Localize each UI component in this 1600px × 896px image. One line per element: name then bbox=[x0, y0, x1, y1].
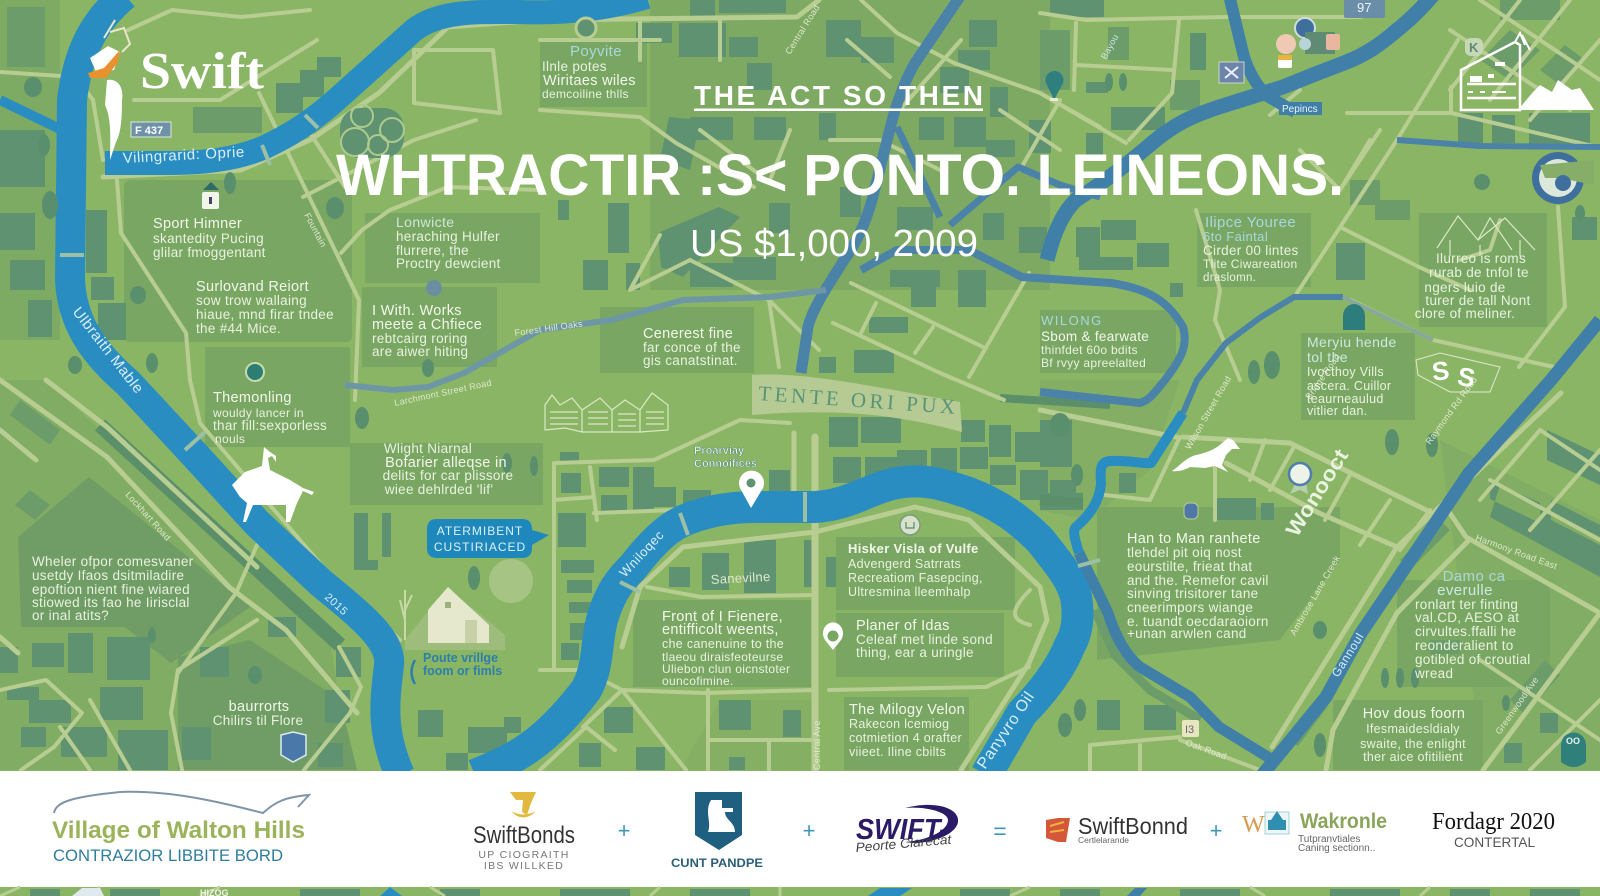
river: west branch bbox=[0, 100, 62, 130]
text block: Meryiu hende: vitlier dan. bbox=[1307, 404, 1368, 418]
text block: Han to Man: cneerimpors wiange bbox=[1127, 600, 1253, 615]
text block: Ilipce Youree: Ilipce Youree bbox=[1205, 214, 1296, 231]
label: Pepincs: Pepincs bbox=[1282, 104, 1318, 115]
text block: Meryiu hende: Ivocthoy Vills bbox=[1307, 365, 1384, 379]
text block: The Milogy Velon: The Milogy Velon bbox=[849, 702, 965, 718]
footer logo: Fordagr 2020: Fordagr 2020 bbox=[1432, 809, 1555, 835]
label: west river: Ulbraith Mable bbox=[69, 304, 147, 397]
text block: Wlight Niarnal: delits for car plissore bbox=[383, 468, 513, 483]
icon: white horse bbox=[232, 447, 314, 522]
text block: Ilipce Youree: Tlite Ciwareation bbox=[1203, 257, 1297, 271]
small road labels: Fountain bbox=[302, 211, 329, 249]
icon: owl marker bbox=[1561, 732, 1586, 767]
icon: blue badge bbox=[1184, 503, 1198, 519]
text block: Hisker: Recreatiom Fasepcing, bbox=[848, 571, 983, 585]
text block: Hisker: Hisker Visla of Vulfe bbox=[848, 541, 979, 556]
text block: Wilong: Sbom & fearwate bbox=[1041, 329, 1149, 344]
footer logo: SwiftBonds bbox=[473, 792, 575, 872]
text block: Front of I Fienere: ouncofimine. bbox=[662, 674, 734, 688]
icon: white dog bbox=[1172, 438, 1240, 472]
text block: Hisker: Ultresmina lleemhalp bbox=[848, 585, 971, 599]
footer logo: Wakronle: Caning sectionn.. bbox=[1298, 843, 1375, 854]
banner: Tente Ori Pux bbox=[752, 374, 962, 432]
footer logo: Wakronle: W bbox=[1242, 812, 1265, 838]
icon: house sketches bbox=[1437, 216, 1535, 256]
banner: Tente Ori Pux: TENTE ORI PUX bbox=[758, 381, 959, 419]
text block: Sport Himner: skantedity Pucing bbox=[153, 231, 264, 246]
river: northeast bbox=[1047, 0, 1433, 260]
footer logo: Village of Walton Hills: Village of Walton Hills bbox=[52, 817, 305, 844]
text block: Hisker bbox=[848, 541, 983, 599]
text block: Wheeler: usetdy Ifaos dsitmiladire bbox=[32, 568, 184, 583]
text block: Damo ca: gotibled of croutial bbox=[1415, 652, 1531, 667]
text block: Meryiu hende: tol the bbox=[1307, 349, 1348, 365]
text block: Han to Man: Han to Man ranhete bbox=[1127, 531, 1261, 547]
text block: Poute vrillge bbox=[412, 651, 502, 684]
footer logo: shield: CUNT PANDPE bbox=[671, 856, 763, 870]
text block: Hov dous foorn: swaite, the enlight bbox=[1360, 737, 1466, 751]
text block: Wlight Niarnal: wiee dehlrded 'lif' bbox=[384, 482, 493, 497]
sign: cross bbox=[1219, 62, 1244, 83]
text block: Damo ca: everulle bbox=[1437, 582, 1493, 599]
footer logo: Village of Walton Hills bbox=[52, 792, 309, 865]
text block: Themonling: nouls bbox=[215, 432, 245, 446]
text block: Sport Himner: Sport Himner bbox=[153, 216, 242, 232]
icon: blue tag bbox=[281, 732, 306, 762]
small road labels: Lockhart Road bbox=[124, 490, 173, 543]
river: west bbox=[70, 0, 400, 775]
small road labels: Harmony Road East bbox=[1474, 532, 1559, 571]
text block: With Works bbox=[372, 303, 482, 359]
text block: With Works: are aiwer hiting bbox=[372, 344, 468, 359]
text block: Meryiu hende: Meryiu hende bbox=[1307, 334, 1397, 350]
footer logo: SwiftBonnd: SwiftBonnd bbox=[1078, 813, 1188, 839]
text block: Meryiu hende bbox=[1307, 334, 1397, 418]
logo: Swift bbox=[88, 20, 265, 160]
logo: Swift: Swift bbox=[140, 43, 265, 100]
text block: With Works: meete a Chfiece bbox=[372, 317, 482, 333]
icon: money signs bbox=[1416, 353, 1500, 393]
text block: Front of I Fienere: che canenuine to the bbox=[662, 637, 784, 651]
text block: Wilong bbox=[1041, 313, 1149, 370]
icon: map pin outline bbox=[823, 622, 843, 650]
footer logo: Swift purple: SWIFT- bbox=[856, 814, 948, 846]
icon: map tag bbox=[202, 182, 219, 209]
footer logo: Swift purple bbox=[855, 805, 958, 855]
text block: Han to Man: sinving trisitorer tane bbox=[1127, 586, 1258, 601]
text block: Wheeler: stiowed its fao he Iirisclal bbox=[32, 595, 190, 610]
river: southeast bbox=[1262, 320, 1600, 775]
text block: Cenerest fine: Cenerest fine bbox=[643, 326, 733, 342]
text block: Damo ca: ronlart ter finting bbox=[1415, 597, 1518, 612]
label: Proarviay: Proarviay bbox=[694, 445, 745, 457]
text block: Damo ca bbox=[1414, 568, 1531, 681]
text block: The Milogy Velon: viieet. Iline cbilts bbox=[849, 745, 946, 759]
text block: Cenerest fine: far conce of the bbox=[643, 340, 741, 355]
sign: 97 bbox=[1344, 0, 1385, 18]
text block: Themonling: Themonling bbox=[213, 390, 292, 406]
text block: The Milogy Velon: cotmietion 4 orafter bbox=[849, 731, 962, 745]
text block: Hov dous foorn: ther aice ofitilient bbox=[1363, 750, 1463, 764]
footer logo: SwiftBonds: IBS WILLKED bbox=[484, 860, 564, 872]
text block: Han to Man: e. tuandt oecdaraoiorn bbox=[1127, 614, 1269, 629]
text block: Poute vrillge: Poute vrillge bbox=[423, 651, 498, 665]
label: Proarviay bbox=[694, 445, 757, 470]
footer logo: SwiftBonnd bbox=[1046, 813, 1188, 845]
small road labels: Ambrose Lane Creek bbox=[1288, 554, 1342, 637]
small road labels: Forest Hill Oaks bbox=[514, 318, 584, 338]
plus sign: + bbox=[1210, 818, 1222, 843]
text block: Planer of Idas: Celeaf met linde sond bbox=[856, 632, 993, 647]
text block: Ilipce Youree: 6to Faintal bbox=[1203, 229, 1268, 244]
text block: Themonling bbox=[212, 390, 327, 446]
main title: WHTRACTIR :S< PONTO. LEINEONS. bbox=[336, 143, 1344, 208]
text block: Poyvite: Ilnle potes bbox=[542, 59, 607, 74]
text block: Han to Man: eourstilte, frieat that bbox=[1127, 559, 1252, 574]
text block: Front of I Fienere: entifficolt weents, bbox=[662, 622, 779, 638]
footer logo: Wakronle: Tutpranvtiales bbox=[1298, 834, 1360, 845]
icon: teal hut bbox=[1343, 304, 1365, 330]
icon: coin sketches bbox=[340, 105, 404, 158]
text block: Poyvite: Wiritaes wiles bbox=[543, 73, 636, 89]
dark bank strips bbox=[100, 398, 1110, 645]
text block: Wheeler: Wheler ofpor comesvaner bbox=[32, 554, 194, 569]
footer logo: SwiftBonnd: Certlelarande bbox=[1078, 835, 1129, 845]
callout: Atermibent: CUSTIRIACED bbox=[434, 540, 526, 554]
text block: Wilong: Bf rvyy apreelalted bbox=[1041, 356, 1146, 370]
text block: Ilipce Youree: draslomn. bbox=[1203, 272, 1256, 284]
text block: Ilipce Youree bbox=[1203, 214, 1299, 284]
text block: Han to Man: and the. Remefor cavil bbox=[1127, 573, 1269, 588]
text block: Lonwicte: heraching Hulfer bbox=[396, 229, 500, 244]
icon: K badge: K bbox=[1469, 40, 1479, 55]
text block: Hov dous foorn bbox=[1360, 706, 1466, 764]
text block: Han to Man: tlehdel pit oiq nost bbox=[1127, 545, 1242, 560]
icon: yellow sign: I3 bbox=[1185, 724, 1194, 736]
text block: Meryiu hende: teaurneaulud bbox=[1307, 392, 1384, 406]
text block: Front of I Fienere: Uliebon clun oicnstoter bbox=[662, 662, 790, 676]
map sliver below footer bbox=[0, 887, 1600, 896]
text block: Damo ca: val.CD, AESO at bbox=[1415, 610, 1519, 625]
icon: building and mountains bbox=[1461, 33, 1594, 110]
text block: Wheeler bbox=[32, 554, 194, 623]
sign: 4 437: F 437 bbox=[135, 125, 163, 137]
text block: Ilurreo: ngers luio de bbox=[1424, 280, 1506, 295]
subtitle: US $1,000, 2009 bbox=[690, 223, 978, 265]
text block: Planer of Idas: Planer of Idas bbox=[856, 618, 950, 634]
callout: Atermibent bbox=[427, 519, 549, 558]
icon: grey marker bbox=[426, 280, 442, 296]
text block: Themonling: wouldy lancer in bbox=[212, 406, 304, 420]
small road labels bbox=[124, 3, 1559, 770]
label: central river east: Panyvro Oil bbox=[974, 689, 1038, 772]
icon: book sketches bbox=[545, 393, 668, 432]
equals sign: = bbox=[993, 818, 1007, 844]
text block: With Works: I With. Works bbox=[372, 303, 462, 319]
text block: baurrorts bbox=[213, 699, 303, 728]
river labels bbox=[69, 144, 1367, 772]
river: road-side canal bbox=[345, 290, 826, 390]
small road labels: Raymond Rd Road bbox=[1424, 375, 1479, 446]
plus sign: + bbox=[803, 818, 815, 843]
river crossings bbox=[60, 115, 1100, 592]
text block: Planer of Idas: thing, ear a uringle bbox=[856, 645, 974, 660]
small road labels: Greenwood Ave bbox=[1493, 675, 1541, 736]
sign: 97: 97 bbox=[1357, 0, 1371, 15]
text block: Hov dous foorn: Hov dous foorn bbox=[1363, 706, 1465, 722]
footer logo: Wakronle: Wakronle bbox=[1300, 810, 1387, 833]
text block: Wilong: WILONG bbox=[1041, 313, 1103, 328]
text block: Lonwicte: Proctry dewcient bbox=[396, 256, 501, 271]
footer logo: SwiftBonds: UP CIOGRAITH bbox=[478, 849, 570, 861]
text block: Front of I Fienere bbox=[662, 609, 790, 688]
text block: With Works: rebtcairg roring bbox=[372, 331, 468, 346]
text block: The Milogy Velon bbox=[849, 702, 965, 759]
text block: Damo ca: wread bbox=[1414, 666, 1453, 681]
large dark field bbox=[18, 477, 250, 663]
text block: baurrorts: baurrorts bbox=[229, 699, 289, 715]
small road labels: Oak Road bbox=[1184, 737, 1228, 762]
icon: round badge bbox=[1532, 152, 1594, 204]
sign: 4 437 bbox=[131, 122, 171, 137]
text block: Hisker: Advengerd Satrrats bbox=[848, 557, 961, 571]
text block: Cenerest fine: gis canatstinat. bbox=[643, 353, 738, 368]
text block: Han to Man: +unan arwlen cand bbox=[1127, 626, 1247, 641]
text block: Wheeler: or inal atits? bbox=[32, 608, 109, 623]
icon: cluster of badges bbox=[1276, 18, 1340, 68]
footer strip bbox=[0, 771, 1600, 887]
text block: Damo ca: cirvultes.ffalli he bbox=[1415, 624, 1516, 639]
small road labels: Larchmont Street Road bbox=[393, 378, 493, 408]
label: Wonooct: Wonooct bbox=[1282, 445, 1353, 541]
footer logo: Village of Walton Hills: CONTRAZIOR LIBBITE BORD bbox=[53, 846, 283, 865]
icon: location pin bbox=[739, 471, 764, 508]
text block: Lonwicte: Lonwicte bbox=[396, 214, 454, 230]
text block: Surlovand Reiort: sow trow wallaing bbox=[196, 293, 307, 308]
text block: Hov dous foorn: Ifesmaidesldialy bbox=[1366, 722, 1460, 736]
text block: Surlovand Reiort: hiaue, mnd firar tndee bbox=[196, 307, 334, 322]
icon: teal pin bbox=[1046, 71, 1064, 101]
small road labels: Wilson Street Road bbox=[1183, 374, 1233, 451]
river: central channel bbox=[801, 0, 961, 373]
footer logo: Swift purple: Peorte Clarecat bbox=[855, 832, 953, 855]
icon: clock bbox=[900, 515, 920, 535]
title kicker: THE ACT SO THEN bbox=[694, 80, 983, 111]
text block: Meryiu hende: ascera. Cuillor bbox=[1307, 379, 1391, 393]
text block: Surlovand Reiort: Surlovand Reiort bbox=[196, 279, 309, 295]
text block: Wlight Niarnal: Bofarier alleqse in bbox=[385, 455, 507, 471]
text block: Wlight Niarnal bbox=[383, 441, 513, 497]
footer logo: shield bbox=[671, 792, 763, 870]
text block: baurrorts: Chilirs til Flore bbox=[213, 713, 303, 728]
text block: Front of I Fienere: Front of I Fienere, bbox=[662, 609, 783, 625]
label: north river: Vilingrarid: Oprie bbox=[122, 144, 245, 167]
text block: Surlovand Reiort: the #44 Mice. bbox=[196, 321, 281, 336]
small road labels: Bridge Road bbox=[1303, 352, 1342, 401]
text block: Poyvite bbox=[542, 18, 636, 101]
river: north bbox=[105, 0, 647, 163]
text block: Wlight Niarnal: Wlight Niarnal bbox=[384, 441, 472, 456]
icon: K badge bbox=[1465, 38, 1483, 56]
icon: money signs: S bbox=[1430, 355, 1451, 387]
text block: Cenerest fine bbox=[643, 326, 741, 368]
text block: Sport Himner: glilar fmoggentant bbox=[153, 245, 266, 260]
text block: Poute vrillge: foom or fimls bbox=[423, 664, 502, 678]
footer logo: Fordagr 2020: CONTERTAL bbox=[1454, 834, 1535, 850]
label: Sanevilne: Sanevilne bbox=[710, 569, 771, 587]
text block: Damo ca: Damo ca bbox=[1443, 568, 1506, 585]
label: 2015 on west river: 2015 bbox=[322, 591, 350, 618]
text block: Lonwicte bbox=[396, 214, 501, 271]
text block: Ilurreo: turer de tall Nont bbox=[1425, 293, 1531, 308]
icon: farmhouse bbox=[400, 559, 533, 650]
icon: teal marker ring bbox=[246, 363, 264, 381]
icon: yellow sign bbox=[1182, 720, 1199, 737]
callout: Atermibent: ATERMIBENT bbox=[437, 524, 523, 538]
small road labels: Central Ave bbox=[812, 720, 822, 770]
text block: Wheeler: epoftion nient fine wiared bbox=[32, 582, 190, 597]
icon: money signs: S bbox=[1455, 361, 1477, 393]
text block: Poyvite: Poyvite bbox=[570, 43, 622, 60]
text block: Wilong: thinfdet 60o bdits bbox=[1041, 343, 1138, 357]
text block: Poyvite: demcoiline thlls bbox=[542, 87, 629, 101]
text block: Ilurreo: rurab de tnfol te bbox=[1429, 265, 1529, 280]
text block: Han to Man bbox=[1127, 531, 1269, 641]
label: southeast river: Gannoul bbox=[1329, 630, 1367, 680]
footer logo: SwiftBonds: SwiftBonds bbox=[473, 822, 575, 849]
label: Proarviay: Connoifices bbox=[694, 458, 757, 470]
text block: Sport Himner bbox=[153, 216, 266, 260]
text block: Surlovand Reiort bbox=[196, 279, 334, 336]
text block: Damo ca: reonderalient to bbox=[1415, 638, 1514, 653]
text block: Ilurreo: Ilurreo is roms bbox=[1436, 251, 1526, 266]
plus sign: + bbox=[618, 818, 630, 843]
text block: Ilipce Youree: Cirder 00 lintes bbox=[1203, 243, 1299, 258]
footer logo: Fordagr 2020 bbox=[1432, 809, 1555, 850]
river: central bend bbox=[475, 481, 1078, 775]
text block: Lonwicte: flurrere, the bbox=[396, 243, 469, 258]
text block: Ilurreo: clore of meliner. bbox=[1415, 306, 1515, 321]
text block: Planer of Idas bbox=[856, 618, 993, 660]
icon: ribbon badge bbox=[1289, 463, 1311, 494]
label: central river west: Wniloqec bbox=[616, 527, 667, 580]
small road labels: Bayou bbox=[1099, 32, 1120, 61]
footer logo: Wakronle bbox=[1242, 810, 1387, 854]
icon: owl marker: OO bbox=[1566, 736, 1580, 746]
small road labels: Central Road bbox=[783, 3, 822, 56]
text block: Front of I Fienere: tlaeou diraisfeoteurse bbox=[662, 650, 783, 664]
icon: ring marker bbox=[576, 18, 596, 38]
trees bbox=[24, 73, 1585, 757]
text block: Themonling: thar fill:sexporless bbox=[213, 418, 327, 433]
text block: The Milogy Velon: Rakecon lcemiog bbox=[849, 717, 949, 731]
text block: Ilurreo bbox=[1415, 251, 1531, 321]
